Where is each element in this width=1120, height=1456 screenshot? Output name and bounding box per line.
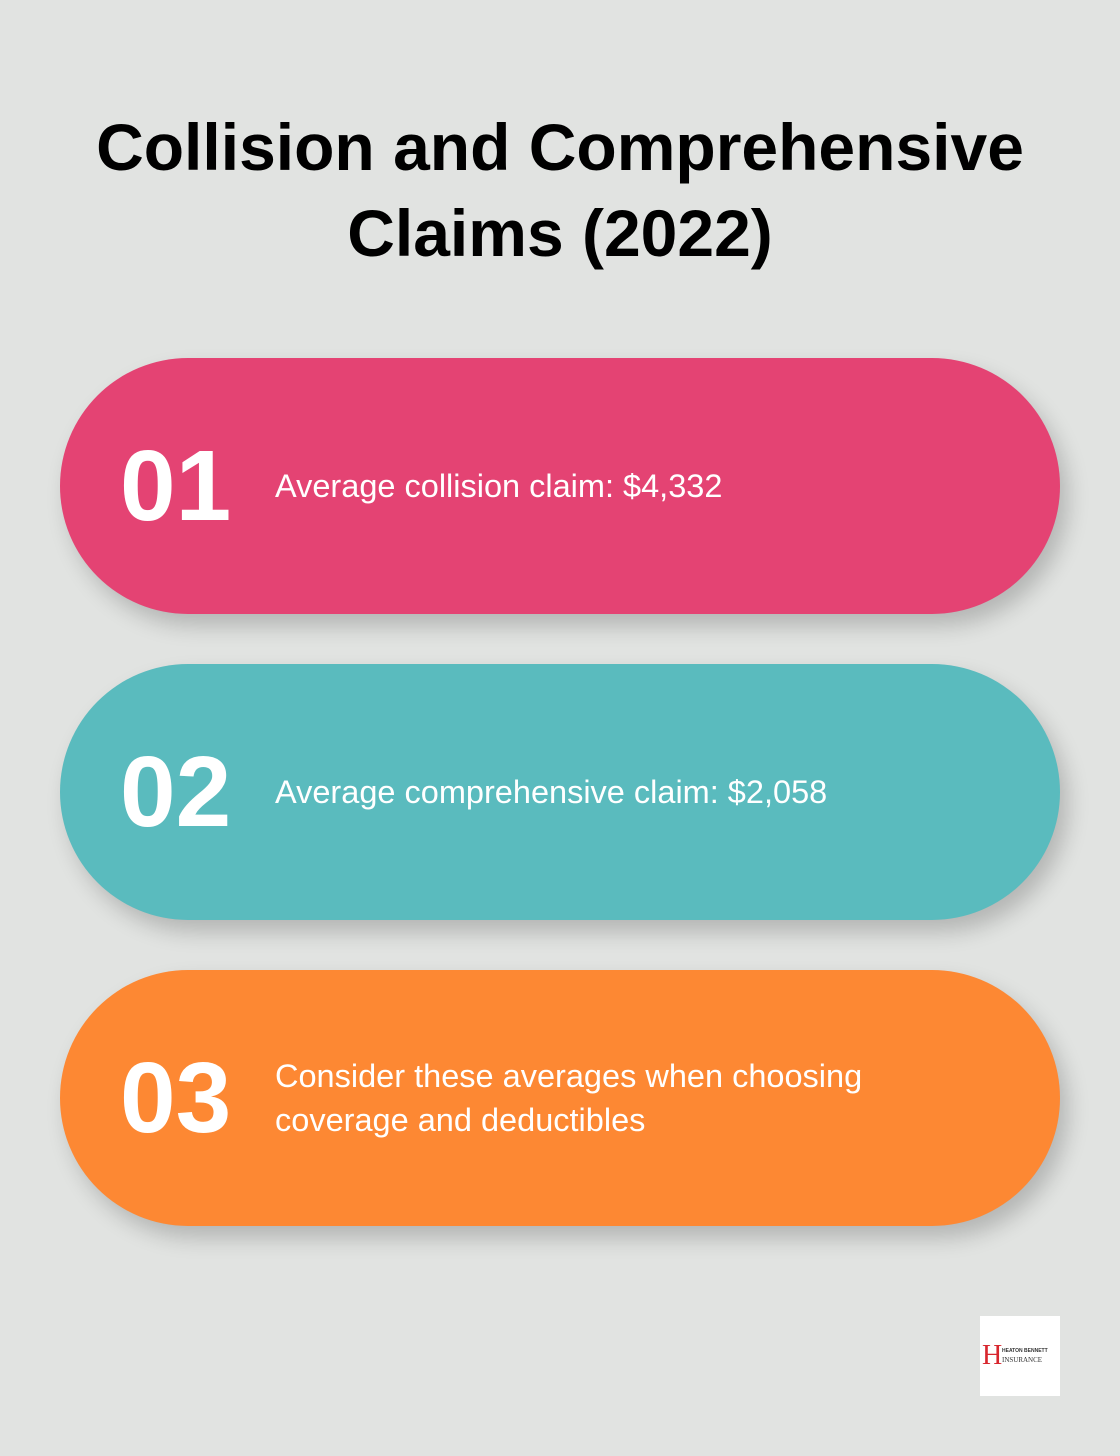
- text 03: [275, 1058, 862, 1138]
- panel: item 02: [60, 664, 1060, 920]
- logo: INSURANCE: [1002, 1356, 1042, 1364]
- number 02: 02: [120, 736, 231, 848]
- text 03: Consider these averages when choosing: [275, 1058, 862, 1094]
- logo: HEATON BENNETT: [1002, 1348, 1048, 1354]
- title: [96, 110, 1024, 270]
- number 03: 03: [120, 1042, 231, 1154]
- logo: [980, 1316, 1060, 1396]
- panel: item 01: [60, 358, 1060, 614]
- text 02: Average comprehensive claim: $2,058: [275, 774, 827, 810]
- text 03: coverage and deductibles: [275, 1102, 645, 1138]
- number 01: 01: [120, 430, 231, 542]
- panel: item 03: [60, 970, 1060, 1226]
- title: Claims (2022): [347, 196, 773, 270]
- text 01: Average collision claim: $4,332: [275, 468, 722, 504]
- logo: H: [982, 1340, 1002, 1371]
- title: Collision and Comprehensive: [96, 110, 1024, 184]
